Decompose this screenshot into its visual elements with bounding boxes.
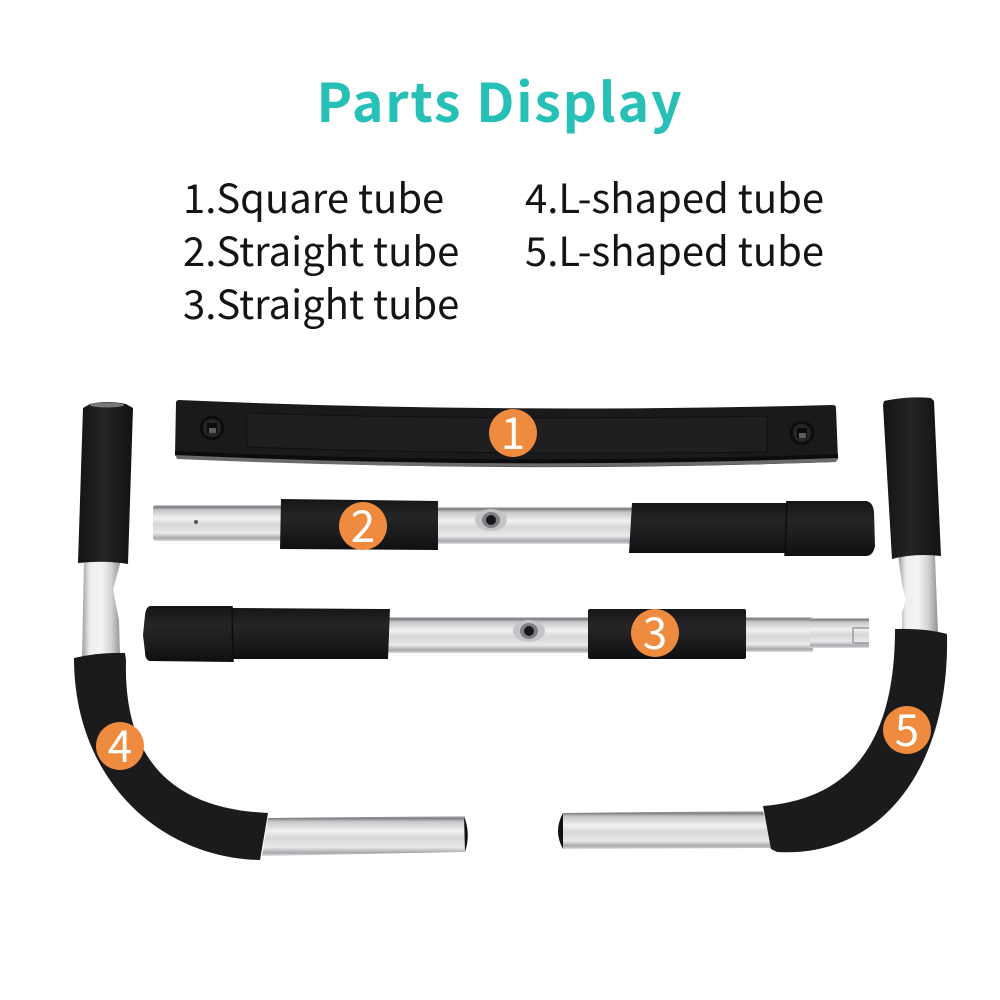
badge 3	[631, 598, 679, 662]
part 2: straight tube	[153, 491, 875, 556]
socket right	[790, 420, 814, 446]
badge 3: 3	[643, 598, 667, 662]
parts list left column: 3.Straight tube	[183, 273, 459, 331]
badge 5	[883, 695, 931, 759]
parts list right column: 5.L-shaped tube	[525, 220, 824, 278]
parts list left column: 1.Square tube	[183, 167, 444, 225]
badge 1: 1	[501, 398, 525, 462]
part 4: L-shaped tube	[74, 402, 468, 860]
badge 4	[96, 711, 144, 775]
part 1: square tube	[175, 398, 838, 467]
parts list left column	[183, 167, 459, 331]
badge 2: 2	[351, 491, 375, 555]
part 5: L-shaped tube	[558, 397, 947, 852]
badge 5: 5	[895, 695, 919, 759]
part 3: straight tube	[143, 598, 869, 662]
parts list right column	[525, 167, 824, 278]
parts list left column: 2.Straight tube	[183, 220, 459, 278]
socket left	[200, 416, 224, 440]
parts list right column: 4.L-shaped tube	[525, 167, 824, 225]
title: Parts Display	[317, 61, 683, 138]
badge 1	[489, 398, 537, 462]
badge 2	[339, 491, 387, 555]
badge 4: 4	[108, 711, 132, 775]
